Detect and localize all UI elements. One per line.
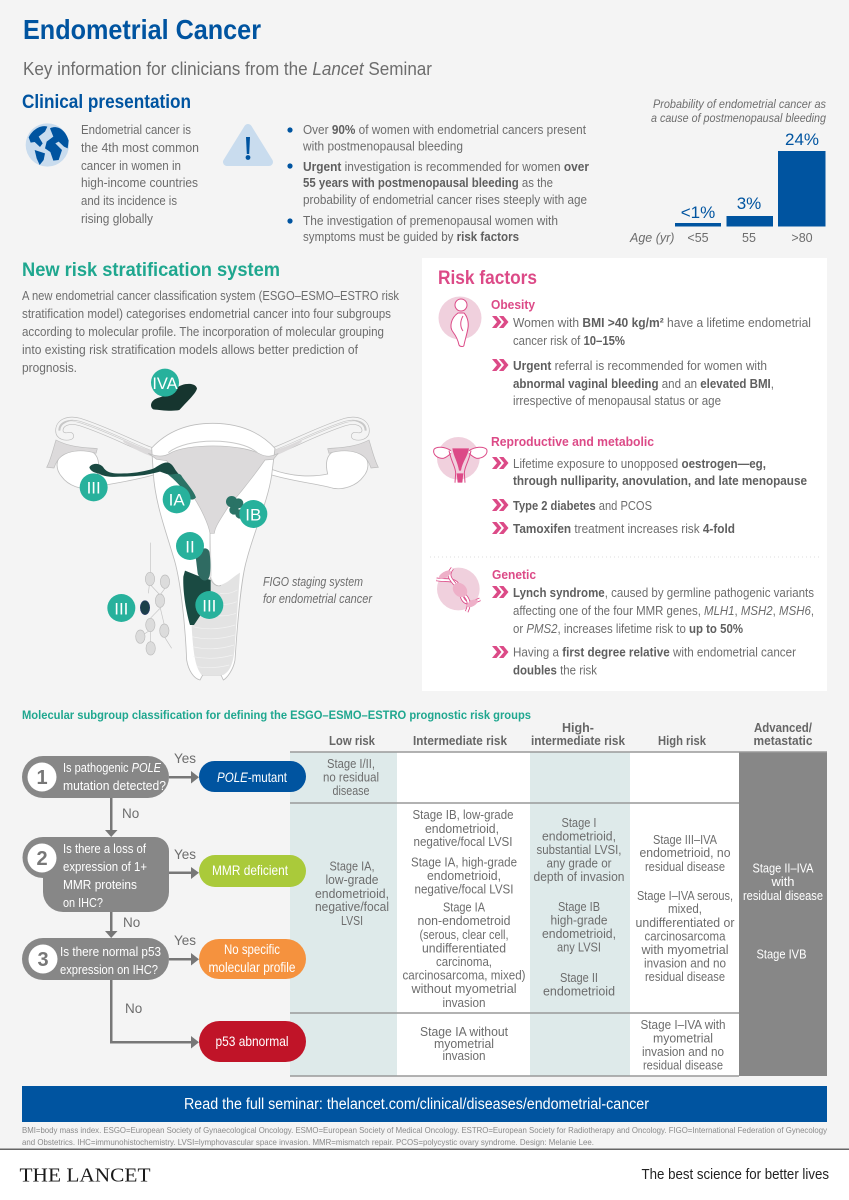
flowchart: molecular classification — [22, 751, 306, 1062]
column: high risk — [636, 833, 734, 1072]
column: low risk: no residual — [323, 770, 379, 784]
text: stratification description — [22, 288, 399, 375]
column: high risk: undifferentiated or — [636, 916, 734, 930]
tagline: The best science for better lives — [642, 1166, 829, 1183]
yes/no labels: No — [125, 1001, 142, 1016]
icon: globe — [26, 123, 69, 167]
column: low risk: endometrioid, — [315, 887, 389, 901]
bar chart: probability by age: 3% — [737, 194, 761, 213]
step 1: mutation detected? — [63, 778, 166, 793]
text: stratification description: into existing risk stratification models allows better prediction of — [22, 342, 358, 357]
icon: warning triangle — [227, 128, 269, 162]
subsection: genetic: Lynch syndrome, caused by germline pathogenic variants — [513, 585, 814, 600]
subsection: genetic — [492, 567, 814, 678]
column: high risk: endometrioid, no — [640, 846, 731, 860]
step 2: Is there a loss of — [63, 841, 146, 856]
table headers: High- — [562, 721, 594, 735]
column: high risk: residual disease — [643, 1058, 723, 1072]
column: intermediate risk: undifferentiated — [422, 942, 506, 956]
caption: FIGO staging system: for endometrial cancer — [263, 592, 373, 606]
column: intermediate risk: invasion — [442, 1049, 486, 1063]
subsection: genetic: Having a first degree relative with endometrial cancer — [513, 644, 797, 660]
bullet list: clinical presentation: with postmenopausal bleeding — [302, 138, 463, 154]
table headers: High risk — [658, 734, 706, 748]
column: intermediate risk: carcinoma, — [436, 955, 492, 969]
bar chart: probability by age — [629, 97, 826, 245]
column: high-intermediate risk: endometrioid, — [542, 830, 616, 844]
bullet list: clinical presentation — [287, 122, 589, 244]
column: high risk: Stage III–IVA — [653, 833, 718, 847]
bullet list: clinical presentation: Over 90% of women with endometrial cancers present — [303, 122, 586, 137]
bar chart: probability by age: <1% — [681, 203, 715, 222]
subsection: reproductive and metabolic: through nulliparity, anovulation, and late menopause — [513, 473, 807, 488]
subsection: obesity: Women with BMI >40 kg/m² have a lifetime endometrial — [513, 315, 811, 330]
step 3 — [22, 938, 169, 980]
text: global incidence: rising globally — [81, 211, 153, 226]
bullet list: clinical presentation: 55 years with postmenopausal bleeding as the — [303, 175, 553, 190]
step 3: Is there normal p53 — [60, 944, 161, 959]
text: global incidence: the 4th most common — [81, 140, 199, 155]
column: high risk: Stage I–IVA with — [640, 1018, 726, 1032]
table headers: metastatic — [754, 734, 813, 748]
diagram: uterus with FIGO stages — [47, 369, 378, 680]
subsection: obesity: Urgent referral is recommended for women with — [513, 358, 767, 373]
column: low risk: LVSI — [341, 914, 363, 928]
step 2: MMR proteins — [63, 877, 137, 892]
column: high risk: carcinosarcoma — [644, 930, 726, 944]
step 2 — [22, 837, 169, 912]
column: intermediate risk: endometrioid, — [427, 869, 501, 883]
caption: FIGO staging system: FIGO staging system — [263, 575, 363, 589]
column: low risk: Stage I/II, — [327, 757, 375, 771]
subsection: reproductive and metabolic: Tamoxifen treatment increases risk 4-fold — [513, 521, 735, 536]
step 2: on IHC? — [63, 895, 103, 910]
yes/no labels: No — [123, 915, 140, 930]
arrows — [105, 771, 199, 1048]
text: stratification description: prognosis. — [22, 360, 77, 375]
column: intermediate risk: Stage IA, high-grade — [411, 856, 517, 870]
subsection: obesity: cancer risk of 10–15% — [513, 333, 625, 348]
text: global incidence: cancer in women in — [81, 158, 181, 173]
column: low risk: disease — [332, 784, 370, 798]
outcome: no specific molecular profile: No specific — [224, 941, 280, 957]
outcome: MMR deficient: MMR deficient — [212, 862, 288, 878]
column: intermediate risk: carcinosarcoma, mixed) — [402, 968, 526, 982]
column: high-intermediate risk: substantial LVSI, — [536, 843, 622, 857]
column: intermediate risk — [402, 808, 526, 1063]
text: global incidence — [81, 122, 199, 226]
table headers: Advanced/ — [754, 721, 812, 735]
bullet list: clinical presentation: probability of endometrial cancer rises steeply with age — [303, 192, 587, 207]
yes/no labels: Yes — [174, 751, 196, 766]
column: advanced/metastatic — [743, 862, 823, 962]
column: intermediate risk: invasion — [442, 996, 486, 1010]
outcome: POLE-mutant — [199, 761, 306, 792]
column: advanced/metastatic: Stage II–IVA — [752, 862, 814, 876]
column: high-intermediate risk — [534, 816, 625, 998]
column: high-intermediate risk: high-grade — [550, 914, 608, 928]
step 3: 3 — [37, 949, 49, 971]
table headers: intermediate risk — [531, 734, 625, 748]
column: intermediate risk: non-endometroid — [418, 914, 511, 928]
yes/no labels: Yes — [174, 847, 196, 862]
subsection: reproductive and metabolic: Lifetime exposure to unopposed oestrogen—eg, — [513, 456, 766, 471]
column: high-intermediate risk: endometrioid — [543, 984, 615, 998]
subsection: reproductive and metabolic: Reproductive and metabolic — [491, 434, 654, 449]
column: high risk: Stage I–IVA serous, — [637, 889, 733, 903]
step 2: expression of 1+ — [63, 859, 147, 874]
column: intermediate risk: without myometrial — [410, 982, 516, 996]
column: intermediate risk: negative/focal LVSI — [414, 882, 514, 896]
bullet list: clinical presentation: symptoms must be guided by risk factors — [303, 229, 519, 244]
yes/no labels: Yes — [174, 933, 196, 948]
bar chart: probability by age: 55 — [742, 231, 756, 245]
column: intermediate risk: endometrioid, — [425, 822, 499, 836]
column: high risk: myometrial — [653, 1032, 713, 1046]
column: intermediate risk: Stage IA — [443, 900, 486, 914]
column: high risk: residual disease — [645, 970, 725, 984]
text: stratification description: according to molecular profile. The incorporation of molecular grouping — [22, 324, 384, 339]
title: Endometrial Cancer — [23, 14, 261, 45]
column: advanced/metastatic: with — [770, 875, 795, 889]
subsection: genetic: Genetic — [492, 567, 536, 582]
outcome: p53 abnormal: p53 abnormal — [216, 1033, 288, 1049]
panel: risk factors — [422, 258, 827, 691]
step 3: expression on IHC? — [60, 962, 158, 977]
table headers — [329, 721, 813, 748]
outcome: no specific molecular profile: molecular profile — [208, 959, 296, 975]
step 1: 1 — [36, 767, 48, 789]
icon: obesity — [438, 296, 482, 346]
column: low risk: negative/focal — [315, 900, 389, 914]
column: high risk: with myometrial — [640, 943, 728, 957]
subsection: reproductive and metabolic: Type 2 diabetes and PCOS — [513, 498, 652, 513]
bar chart: probability by age: <55 — [687, 231, 709, 245]
text: stratification description: A new endometrial cancer classification system (ESGO–ESMO–ESTRO risk — [22, 288, 399, 303]
diagram: uterus with FIGO stages: IB — [245, 505, 261, 524]
heading: new risk stratification system: New risk stratification system — [22, 260, 280, 281]
bar chart: probability by age: a cause of postmenopausal bleeding — [651, 111, 826, 125]
diagram: uterus with FIGO stages: IVA — [152, 374, 178, 393]
icon: reproductive organs — [434, 437, 487, 483]
column: intermediate risk: negative/focal LVSI — [414, 835, 512, 849]
bar chart: probability by age: 24% — [785, 130, 819, 149]
column: low risk: low-grade — [326, 873, 379, 887]
column: intermediate risk: (serous, clear cell, — [420, 928, 508, 942]
yes/no labels — [122, 751, 196, 1016]
text: global incidence: high-income countries — [81, 175, 198, 190]
bar chart: probability by age: >80 — [791, 231, 813, 245]
column: high-intermediate risk: Stage II — [560, 971, 598, 985]
column: high risk: mixed, — [668, 902, 702, 916]
diagram: uterus with FIGO stages: II — [185, 537, 195, 556]
bullet list: clinical presentation: Urgent investigation is recommended for women over — [303, 159, 589, 174]
subtitle: Key information for clinicians from the Lancet Seminar — [23, 59, 432, 79]
footnote: abbreviations: and Obstetrics. IHC=immunohistochemistry. LVSI=lymphovascular space invasion. MMR=mismatch repair. PCOS=polycystic ovary syndrome. Design: Melanie Lee. — [22, 1137, 594, 1147]
icon: DNA helix — [436, 568, 480, 612]
diagram: uterus with FIGO stages: III — [202, 596, 216, 615]
column: high risk: invasion and no — [644, 956, 726, 970]
table headers: Low risk — [329, 734, 375, 748]
column: high-intermediate risk: Stage I — [562, 816, 596, 830]
subsection: obesity: abnormal vaginal bleeding and an elevated BMI, — [513, 376, 774, 391]
table: risk groups — [290, 721, 827, 1076]
outcome: p53 abnormal — [199, 1021, 306, 1062]
column: low risk — [315, 757, 389, 928]
heading: clinical presentation: Clinical presentation — [22, 92, 191, 113]
column: high risk: residual disease — [645, 860, 725, 874]
column: high-intermediate risk: Stage IB — [558, 900, 600, 914]
column: intermediate risk: Stage IA without — [420, 1025, 509, 1039]
subsection: obesity — [491, 297, 811, 408]
subsection: obesity: Obesity — [491, 297, 536, 312]
subsection: reproductive and metabolic — [491, 434, 807, 536]
text: stratification description: stratification model) categorises endometrial cancer into four subgroups — [22, 306, 391, 321]
column: advanced/metastatic: residual disease — [743, 889, 823, 903]
column: intermediate risk: Stage IB, low-grade — [412, 808, 514, 822]
column: high-intermediate risk: any grade or — [546, 856, 612, 870]
text: global incidence: Endometrial cancer is — [81, 122, 191, 137]
diagram: uterus with FIGO stages: IA — [169, 491, 185, 510]
subsection: genetic: or PMS2, increases lifetime risk to up to 50% — [513, 621, 743, 636]
banner: read the full seminar — [22, 1086, 827, 1122]
column: low risk: Stage IA, — [330, 860, 374, 874]
bullet list: clinical presentation: The investigation of premenopausal women with — [303, 213, 558, 228]
caption: FIGO staging system — [263, 575, 373, 606]
outcome: MMR deficient — [199, 855, 306, 887]
heading: molecular subgroup classification: Molecular subgroup classification for defining the ESGO–ESMO–ESTRO prognostic risk groups — [22, 710, 531, 722]
subsection: genetic: doubles the risk — [513, 662, 597, 678]
step 1 — [22, 756, 169, 798]
column: high-intermediate risk: any LVSI — [557, 940, 601, 954]
banner: read the full seminar: Read the full seminar: thelancet.com/clinical/diseases/endometrial-cancer — [184, 1096, 649, 1113]
subsection: genetic: affecting one of the four MMR genes, MLH1, MSH2, MSH6, — [513, 603, 814, 618]
diagram: uterus with FIGO stages: III — [114, 599, 128, 618]
footnote: abbreviations — [22, 1125, 828, 1147]
text: global incidence: and its incidence is — [81, 193, 177, 208]
bar chart: probability by age: Probability of endometrial cancer as — [653, 97, 826, 111]
column: intermediate risk: myometrial — [434, 1037, 494, 1051]
heading: risk factors: Risk factors — [438, 267, 537, 289]
table headers: Intermediate risk — [413, 734, 507, 748]
diagram: uterus with FIGO stages: III — [87, 479, 101, 498]
column: advanced/metastatic: Stage IVB — [756, 948, 806, 962]
subsection: obesity: irrespective of menopausal status or age — [513, 393, 721, 408]
column: high-intermediate risk: endometrioid, — [542, 927, 616, 941]
column: high risk: invasion and no — [642, 1045, 724, 1059]
yes/no labels: No — [122, 806, 139, 821]
step 2: 2 — [36, 848, 48, 870]
bar chart: probability by age: Age (yr) — [629, 231, 674, 245]
column: high-intermediate risk: depth of invasion — [534, 870, 625, 884]
logo: The Lancet: THE LANCET — [20, 1164, 150, 1186]
outcome: no specific molecular profile — [199, 939, 306, 979]
outcome: POLE-mutant: POLE-mutant — [217, 769, 287, 785]
step 1: Is pathogenic POLE — [63, 760, 161, 775]
